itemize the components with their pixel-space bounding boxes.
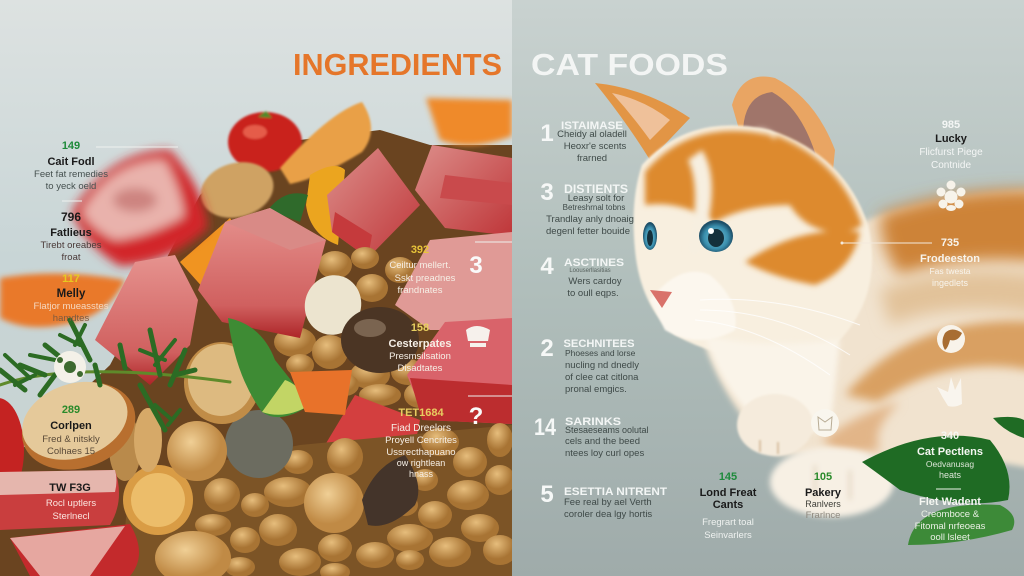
step 5 [540,481,667,520]
green leaf back [268,193,308,222]
callout: Frodeeston: ingedlets [932,278,969,288]
icon: ball [54,351,86,383]
chickpea [167,421,227,481]
callout: Lucky: 985 [942,119,960,131]
cat nose [650,290,672,308]
cat body [700,190,1024,470]
callout: Cat Pections: Oedvanusag [926,459,974,469]
panel: cat foods background [512,0,1024,576]
illustration: cat [595,77,1024,545]
callout: TET1684: Proyell Cencrites [385,435,457,446]
heading: cat foods: CAT FOODS [531,47,728,82]
callout: Corlpen [42,404,100,457]
dark olive [341,307,419,373]
ham slice bottom left [0,470,119,530]
icon: round bowl [937,325,965,353]
callout: Cat Food: to yeck oeld [46,181,96,192]
title [293,47,728,82]
callout: 392: Sskt preadnes [395,273,456,284]
callout: Lond Freat Cants [700,471,757,541]
callout: Corlpen: Fred & nitskly [42,434,100,445]
callout: Cat Food [34,140,108,192]
step 14: SARINKS [565,416,621,428]
head white forehead stripe [688,150,712,255]
callout: 158 [389,322,451,374]
step 3: Trandlay anly dnoaig [546,214,634,225]
ham lower [326,395,420,442]
cat lower paw [770,447,894,517]
step 4: to oull eqps. [567,288,619,299]
callout: Lucky: Lucky [935,133,968,145]
step 2 [540,335,639,395]
callout: TET1684: TET1684 [398,407,445,419]
step 3: 3 [540,179,554,206]
step 5: ESETTIA NITRENT [564,486,667,498]
callout: Frodeeston: Frodeeston [920,253,980,265]
meat slice large [72,150,208,266]
step 3 [540,179,634,237]
step 14: 14 [534,414,557,441]
icon: paw ball [936,180,966,211]
kibble cluster centre [274,247,418,408]
food base [0,130,512,576]
step 2: of clee cat citlona [565,372,639,383]
ham cube top [327,148,420,258]
tomato left [0,398,24,472]
callout: Lucky [919,119,983,171]
left carrot slice [0,273,125,327]
ham slice bottom [10,524,139,576]
step 3: Leasy solt for [568,193,624,204]
number 3: 3 [469,252,483,279]
callout: TW F3G: TW F3G [49,482,91,494]
step 4: Loouserllasitias [569,268,611,274]
step 1 [540,120,627,164]
tomato [228,111,302,172]
orange wedge [280,102,371,184]
step 3: Betreshrnal tobns [563,203,625,212]
step 1: 1 [540,120,554,147]
callout: Pakery [805,471,842,521]
cat chest [705,335,840,435]
step 4: ASCTINES [564,257,624,269]
step 3: DISTIENTS [564,182,628,196]
callout: TET1684: Fiad Dreelors [391,423,451,434]
kibble base bottom [120,425,512,576]
callout: TET1684 [385,407,457,479]
callout: TW F3G: Rocl uptlers [46,498,96,509]
cat back orange [880,190,1024,275]
callout: TW F3G: Sterlnecl [53,511,89,522]
step 1: frarned [577,153,607,164]
callout: 392 [389,244,456,296]
ham left [95,255,198,385]
icon: hand [937,377,962,407]
callout: Lucky: Contnide [931,160,971,171]
step 4: 4 [540,253,554,280]
illustration: food pile [0,98,517,576]
yellow pepper [306,166,345,245]
biscuits round bottom [123,465,364,576]
callout: 158: Presmsilsation [389,351,451,362]
callout: 392: Ceiltur mellert. [389,260,451,271]
callout: Lond Freat Cants: Seinvarlers [704,530,752,541]
cat front paw [737,394,813,456]
callout: Lond Freat Cants: 145 [719,471,737,483]
carrot slice [290,370,352,415]
callout: Fatlieus: Fatlieus [50,227,92,239]
orange stripe on body [845,321,1024,402]
step 14: ntees loy curl opes [565,448,644,459]
ham cube centre [198,208,326,338]
callout: Fatlieus: 796 [61,210,81,224]
callout: Frodeeston: 735 [941,237,959,249]
callout: Flet Wadent: ooll lsleet [930,532,970,543]
callout: Pakery: Frarlnce [806,510,840,521]
callout: 158: Cesterpates [389,338,451,350]
callout: Cat Pections [917,430,983,480]
callout: 392: 392 [411,244,429,256]
heading: ingredients: INGREDIENTS [293,47,502,82]
callout: Fatlieus: Tirebt oreabes [41,240,102,251]
step 2: Phoeses and lorse [565,348,636,358]
round potato slice [184,342,260,424]
ear left [595,83,690,160]
step 1: ISTAIMASE [561,120,623,132]
ham cube right [415,145,512,236]
callout: Lond Freat Cants: Lond Freat [700,487,757,499]
step 4 [540,253,624,299]
step 14: Stesaeseams oolutal [565,425,649,435]
step 2: SECHNITEES [564,338,634,350]
callout: Corlpen: 289 [62,404,80,416]
kibble bottom [195,423,517,576]
step list [534,120,667,520]
step 1: Cheidy al oladell [557,129,627,140]
callout: TET1684: Ussrecthapuano [386,447,456,458]
blurred carrot top right [426,98,512,145]
leaf large [862,436,1010,503]
cat left eye [643,222,657,250]
callout: Flet Wadent: Fitomal nrfeoeas [915,521,986,532]
callout: Cat Pections: 340 [941,430,959,442]
grey stone [225,410,293,478]
callout: Cat Food: Cait Fodl [47,156,95,168]
white bean [304,275,362,335]
leaf green centre [228,318,310,417]
icon: cup [811,409,839,437]
callout: Lucky: Flicfurst Piege [919,147,983,158]
step 14 [534,414,649,459]
panel: ingredients background [0,0,512,576]
step 5: Fee real by ael Verth [564,497,652,508]
callout: Frodeeston [840,237,980,288]
callout: Fatlieus: froat [61,252,81,263]
step 1: Heoxr'e scents [564,141,627,152]
callout: Melly: hamdtes [53,313,89,324]
head orange patches [645,131,862,285]
callout: Pakery: Ranlvers [805,499,841,509]
ham slice right [395,232,512,330]
callout: Melly [34,273,109,324]
bread slice label bg [22,382,136,470]
ear right [732,77,835,200]
callout: Melly: 117 [62,273,80,285]
callout: 158: 158 [411,322,429,334]
herbs [0,320,230,430]
callout: Fatlieus [41,210,102,263]
cat muzzle [650,272,736,340]
callout: Cat Food: Feet fat remedies [34,169,108,180]
callout: 392: frandnates [398,285,443,296]
whiskers [695,299,860,375]
callout: Pakery: Pakery [805,487,842,499]
callout: Cat Pections: Cat Pectlens [917,446,983,458]
callout: Melly: Flatjor mueasstes [34,301,109,312]
icon: basket [466,326,490,347]
white flowing lines [62,147,512,396]
callout: Pakery: 105 [814,471,832,483]
callout: Flet Wadent: Flet Wadent [919,496,981,508]
icon: question mark: ? [469,403,483,430]
callout: TET1684: ow rightlean [397,458,445,468]
dark olive bottom [362,455,418,526]
callout: Lond Freat Cants: Cants [713,499,743,511]
step 2: nucling nd dnedly [565,360,639,371]
leaf lower [908,504,1014,545]
callout: 158: Disadtates [398,363,443,374]
nut stack [109,408,162,481]
callout: Flet Wadent: Creomboce & [921,509,980,520]
orange fur lower [822,402,900,455]
red ham block [407,318,512,424]
cat right eye [699,220,733,252]
callout: Cat Pections: heats [939,470,962,480]
cat flank tan [880,271,1024,325]
leaf top right [993,417,1024,438]
step 2: pronal emgics. [565,384,627,395]
small tan piece [200,160,275,220]
cat head [634,125,872,358]
step 14: cels and the beed [565,436,640,447]
step 5: coroler dea lgy hortis [564,509,652,520]
step 4: Wers cardoy [568,276,622,287]
callout: Flet Wadent [915,489,986,543]
callout: Corlpen: Colhaes 15 [47,446,95,457]
step 2: 2 [540,335,554,362]
callout: Frodeeston: Fas twesta [929,266,971,276]
callout: Melly: Melly [57,288,86,300]
callout: Cat Food: 149 [62,140,80,152]
callout: TW F3G [46,482,96,522]
callout: TET1684: hnass [409,469,434,479]
callout: Corlpen: Corlpen [50,420,92,432]
callout: Lond Freat Cants: Fregrart toal [702,517,754,528]
step 5: 5 [540,481,554,508]
carrot piece [180,218,232,285]
step 3: degenl fetter bouide [546,226,630,237]
